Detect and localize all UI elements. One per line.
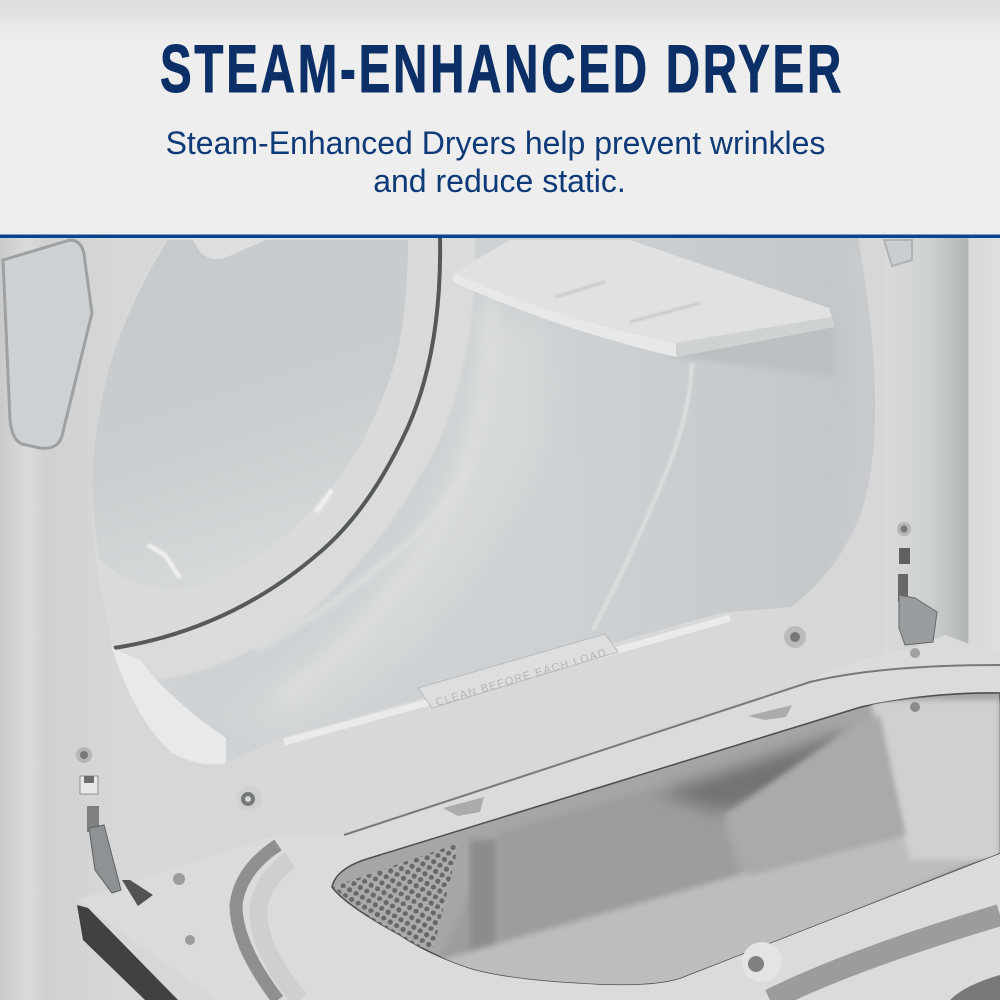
left hinge [80,776,153,906]
dark door gasket [114,238,440,648]
door window [332,693,1000,984]
drum opening [92,238,875,690]
door lower edge [950,975,1000,1000]
drum light bands [447,353,517,550]
embossed panel shape [3,240,92,448]
drum lower lip [112,648,226,764]
window reflections [332,700,1000,990]
screws [76,522,920,982]
lint screen ledge [240,607,803,837]
subtitle: and reduce static. [373,163,626,199]
drum baffle [453,240,835,357]
lint screen handle: CLEAN BEFORE EACH LOAD [434,647,609,709]
baffle shadow [523,305,835,377]
door seal [236,845,278,1000]
back wall ring [110,238,475,681]
panel: dryer interior photo [0,236,1000,1000]
highlights [148,545,180,578]
door dark edge [77,905,178,1000]
door [77,635,1000,1000]
right hinge [898,548,937,645]
braided seal [770,915,1000,1000]
perforated vent [332,843,459,947]
drum back wall [92,240,408,548]
header band [0,0,1000,238]
drum bolt mount [192,238,270,259]
subtitle: Steam-Enhanced Dryers help prevent wrinkles [166,125,825,161]
